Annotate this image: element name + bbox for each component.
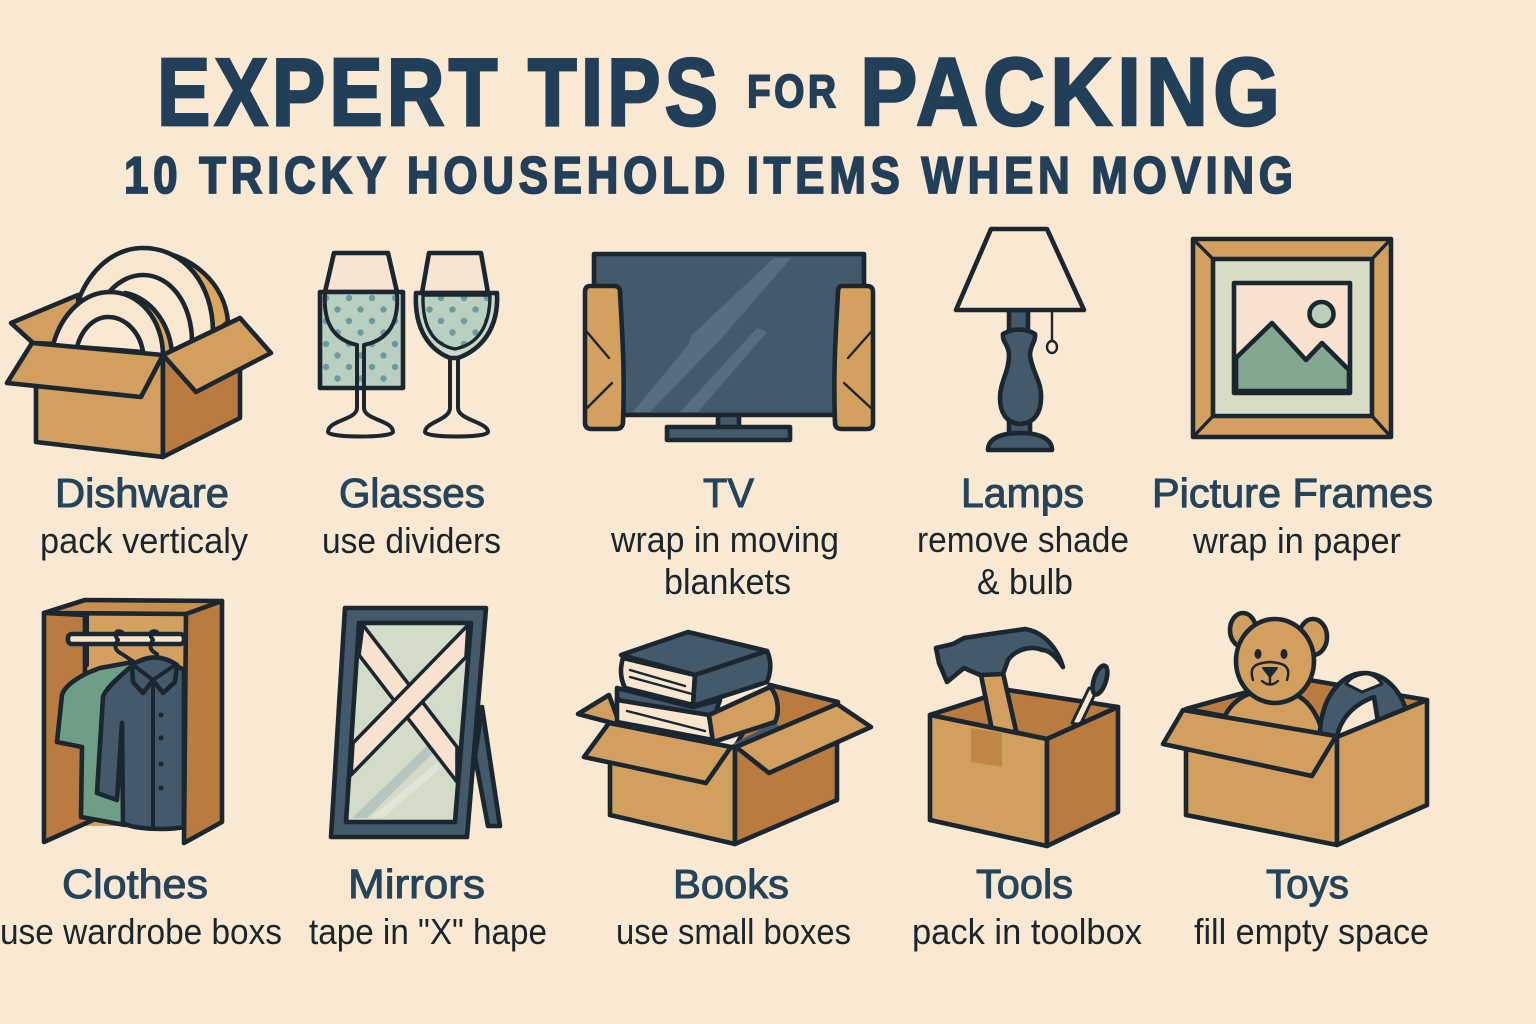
title: EXPERT TIPS — [157, 38, 718, 146]
tip: tape in x shape: tape in "X" hape — [309, 911, 547, 952]
panel: dishware — [7, 248, 271, 561]
tip: remove shade and bulb: remove shade — [917, 519, 1129, 560]
icon: tv with blanket corners — [585, 254, 873, 440]
label: picture frames: Picture Frames — [1152, 470, 1433, 516]
panel: books — [578, 632, 871, 952]
icon: wine glasses — [320, 253, 497, 436]
tip: remove shade and bulb: & bulb — [977, 561, 1073, 602]
tip: use wardrobe boxes: use wardrobe boxs — [0, 911, 282, 952]
title: FOR — [747, 66, 836, 118]
title: PACKING — [860, 38, 1280, 146]
tip: use dividers: use dividers — [322, 520, 501, 561]
panel: lamps — [917, 229, 1129, 602]
panel: tools — [912, 629, 1142, 952]
panel: tv — [585, 254, 873, 602]
panel: clothes — [0, 600, 282, 952]
icon: table lamp — [956, 229, 1084, 450]
panel: mirrors — [309, 608, 547, 952]
icon: box with teddy bear and ball — [1163, 613, 1427, 845]
tip: wrap in moving blankets: wrap in moving — [610, 519, 839, 560]
panel: glasses — [320, 253, 501, 561]
icon: wardrobe box with shirts — [44, 600, 222, 843]
icon: box with books — [578, 632, 871, 844]
tip: wrap in moving blankets: blankets — [664, 561, 791, 602]
label: glasses: Glasses — [339, 470, 485, 516]
icon: box of plates — [7, 248, 271, 457]
icon: framed picture — [1193, 239, 1391, 437]
label: toys: Toys — [1266, 861, 1349, 907]
label: tools: Tools — [976, 861, 1073, 907]
label: dishware: Dishware — [55, 470, 229, 516]
tip: pack vertically: pack verticaly — [40, 520, 248, 561]
label: mirrors: Mirrors — [348, 861, 485, 907]
icon: toolbox with hammer and brush — [930, 629, 1118, 846]
label: tv: TV — [703, 470, 755, 516]
tip: fill empty space: fill empty space — [1194, 911, 1429, 952]
tip: wrap in moving blankets — [610, 519, 839, 602]
label: lamps: Lamps — [961, 470, 1084, 516]
tip: use small boxes: use small boxes — [616, 911, 851, 952]
tip: pack in toolbox: pack in toolbox — [912, 911, 1142, 952]
icon: taped mirror — [331, 608, 500, 837]
title — [157, 38, 1280, 146]
tip: wrap in paper: wrap in paper — [1192, 520, 1401, 561]
label: books: Books — [673, 861, 789, 907]
subtitle: 10 TRICKY HOUSEHOLD ITEMS WHEN MOVING — [124, 147, 1293, 205]
panel: picture frames — [1152, 239, 1433, 561]
tip: remove shade and bulb — [917, 519, 1129, 602]
panel: toys — [1163, 613, 1429, 952]
label: clothes: Clothes — [62, 861, 208, 907]
